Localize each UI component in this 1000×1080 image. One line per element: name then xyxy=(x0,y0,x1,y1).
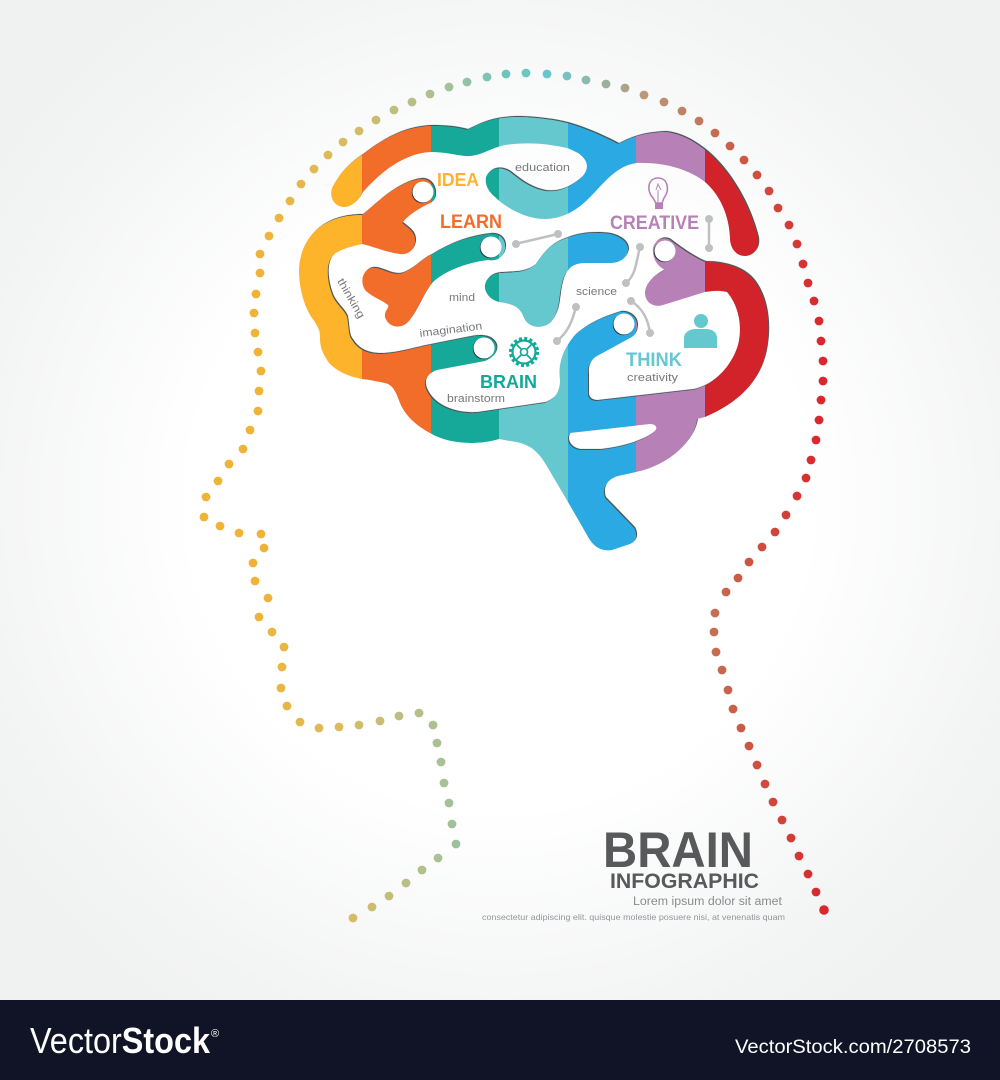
subtitle: INFOGRAPHIC: INFOGRAPHIC xyxy=(610,869,759,893)
icon: person xyxy=(684,314,717,348)
dotted head outline xyxy=(200,69,829,922)
footer bar xyxy=(0,1000,1000,1080)
label: science: science xyxy=(576,286,617,298)
text: lorem line: Lorem ipsum dolor sit amet xyxy=(633,896,783,908)
text: description line: consectetur adipiscing elit. quisque molestie posuere nisi, at venenatis quam xyxy=(482,912,785,922)
connector lines xyxy=(512,215,713,345)
orange and green arm xyxy=(362,234,505,327)
label: CREATIVE: CREATIVE xyxy=(610,213,699,234)
footer logo: VectorStock xyxy=(30,1020,211,1061)
brain shapes xyxy=(299,117,768,550)
teal and blue arm xyxy=(485,233,628,327)
label: education: education xyxy=(515,162,570,174)
node circles xyxy=(412,182,676,359)
label: imagination: imagination xyxy=(419,320,483,340)
footer url: VectorStock.com/2708573 xyxy=(735,1037,971,1058)
label: mind: mind xyxy=(449,292,475,304)
icon: light bulb xyxy=(649,178,667,209)
icon: gear xyxy=(510,338,538,366)
label: thinking: thinking xyxy=(334,276,367,321)
main brain body xyxy=(299,179,768,550)
label: creativity: creativity xyxy=(627,372,679,384)
label: BRAIN: BRAIN xyxy=(480,371,537,392)
small keywords xyxy=(334,162,679,405)
label: THINK: THINK xyxy=(626,350,682,371)
top arc of brain xyxy=(331,117,758,256)
title block xyxy=(482,822,785,922)
label: LEARN: LEARN xyxy=(440,212,502,233)
label: IDEA: IDEA xyxy=(437,170,479,190)
footer registered mark: ® xyxy=(211,1028,219,1040)
label: brainstorm: brainstorm xyxy=(447,393,505,405)
brain keywords xyxy=(437,170,699,392)
title: BRAIN: BRAIN xyxy=(603,822,753,878)
